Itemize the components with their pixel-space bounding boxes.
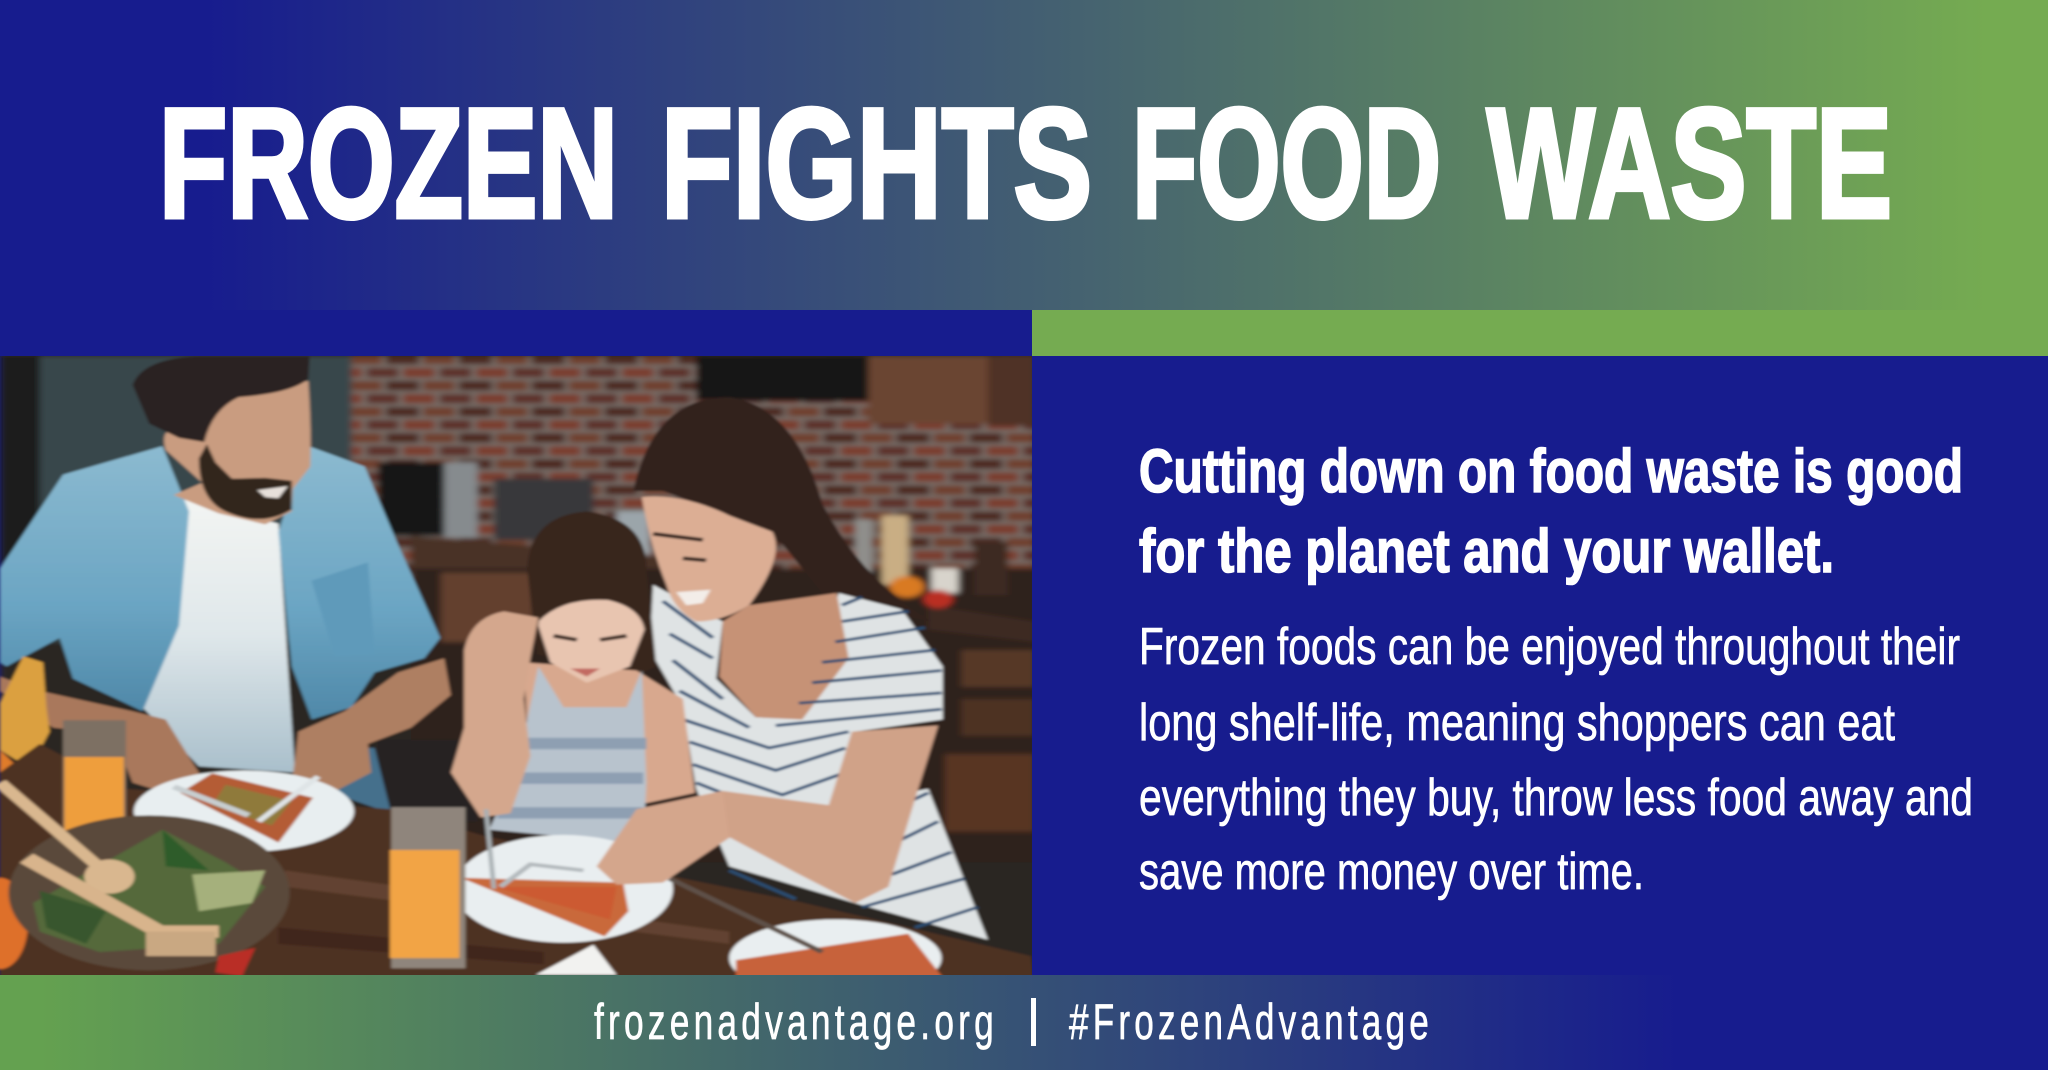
bananas [0, 655, 53, 774]
juice glass: man [63, 720, 126, 839]
footer links: frozenadvantage.org [594, 994, 998, 1050]
sub-heading [1139, 437, 1963, 585]
title: FROZEN [159, 77, 618, 251]
napkin [536, 945, 617, 975]
hands cutting pizza [596, 807, 730, 886]
plate with pizza: woman [454, 809, 673, 943]
salad bowl [0, 783, 290, 976]
plate with pizza: foreground [666, 877, 944, 975]
footer links [594, 994, 1433, 1050]
kitchen background [0, 340, 1040, 980]
title: FOOD [1132, 77, 1441, 251]
top banner gradient [0, 0, 2048, 310]
sub-heading: for the planet and your wallet. [1139, 517, 1834, 585]
title: WASTE [1487, 77, 1892, 251]
man [0, 356, 451, 813]
navy accent strip [0, 310, 1032, 356]
woman [632, 398, 990, 942]
title [159, 77, 1892, 251]
plate with pizza: man [134, 770, 354, 852]
girl [451, 511, 695, 844]
footer bar gradient [0, 975, 2048, 1070]
photo: family eating pizza in kitchen [0, 340, 1040, 997]
body paragraph: save more money over time. [1139, 843, 1644, 901]
footer links: #FrozenAdvantage [1069, 994, 1433, 1050]
green accent strip [1032, 310, 2048, 356]
table [0, 744, 1034, 980]
body paragraph [1139, 618, 1973, 901]
title: FIGHTS [661, 77, 1092, 251]
juice glass: centre [390, 807, 465, 968]
